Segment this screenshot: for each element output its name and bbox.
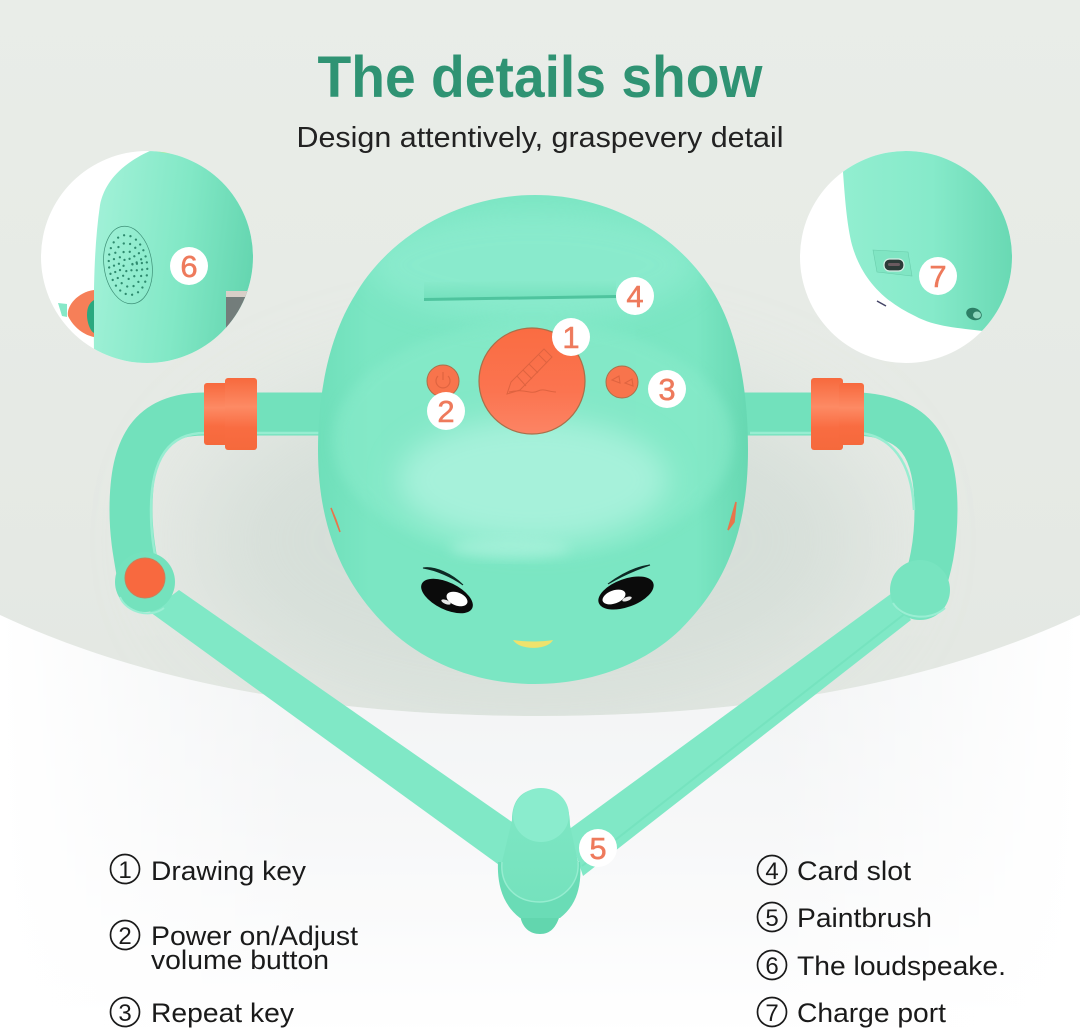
badge 6: 6	[180, 249, 198, 284]
side accents	[331, 508, 340, 532]
right arm	[568, 378, 950, 876]
paintbrush	[498, 788, 580, 934]
legend item 7: 7	[765, 1000, 779, 1027]
legend item 4: Card slot	[797, 856, 912, 886]
badge 3	[648, 370, 686, 408]
legend: right column	[758, 856, 1006, 1028]
legend item 1: Drawing key	[151, 856, 307, 886]
beak	[513, 640, 553, 648]
badge 6	[170, 247, 208, 285]
joint	[115, 552, 175, 612]
legend item 4	[758, 856, 912, 886]
icon: side hole	[964, 306, 984, 322]
badge 1: 1	[562, 320, 580, 355]
left eye	[416, 568, 478, 620]
legend item 6: The loudspeake.	[797, 951, 1006, 981]
orange button	[125, 558, 165, 598]
left arm	[115, 378, 512, 870]
legend item 2: 2	[118, 923, 132, 950]
badge 4: 4	[626, 279, 644, 314]
inset: loudspeaker detail	[41, 150, 270, 365]
cuff	[204, 378, 257, 450]
inset: charge port detail	[800, 150, 1020, 363]
legend item 2: volume button	[151, 945, 329, 975]
badge 7	[919, 257, 957, 295]
power button	[427, 365, 459, 397]
legend item 2: Power on/Adjust	[151, 921, 359, 951]
legend item 4: 4	[765, 858, 779, 885]
badge 5: 5	[589, 831, 607, 866]
legend item 3: Repeat key	[151, 998, 295, 1028]
lower bar right	[568, 593, 911, 876]
badge 3: 3	[658, 372, 676, 407]
robot body	[318, 195, 748, 684]
title: The details show	[318, 45, 763, 110]
joint	[890, 560, 950, 620]
legend item 5: Paintbrush	[797, 903, 932, 933]
right eye	[594, 565, 658, 616]
badge 5	[579, 829, 617, 867]
card slot	[424, 280, 616, 301]
legend: left column	[110, 854, 359, 1028]
legend item 1: 1	[118, 857, 132, 884]
lower bar left	[150, 590, 512, 870]
badge 7: 7	[929, 259, 947, 294]
repeat button	[606, 366, 638, 398]
legend item 6: 6	[765, 953, 779, 980]
badge 1	[552, 318, 590, 356]
icon: speaker grille	[99, 223, 157, 307]
legend item 2	[110, 920, 359, 975]
legend item 5: 5	[765, 905, 779, 932]
legend item 7: Charge port	[797, 998, 947, 1028]
icon: pencil	[507, 349, 556, 394]
drawing key	[479, 328, 585, 434]
legend item 3: 3	[118, 1000, 132, 1027]
icon: USB-C port	[884, 259, 904, 271]
cuff	[811, 378, 864, 450]
subtitle: Design attentively, graspevery detail	[296, 122, 784, 154]
badge 4	[616, 277, 654, 315]
badge 2: 2	[437, 394, 455, 429]
badge 2	[427, 392, 465, 430]
